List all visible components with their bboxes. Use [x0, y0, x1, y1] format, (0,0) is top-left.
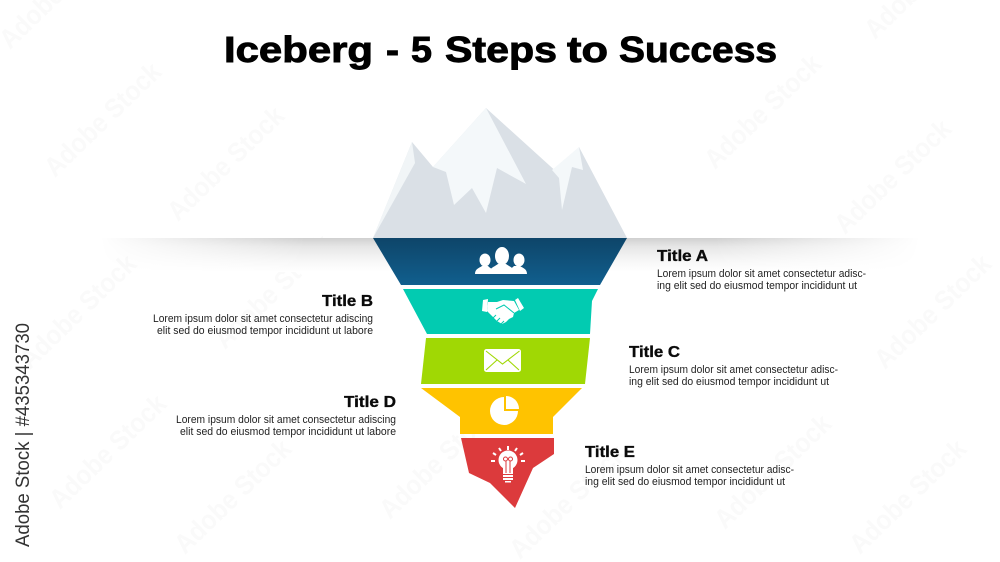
watermark pattern: Adobe Stock	[698, 48, 828, 174]
watermark pattern: Adobe Stock	[161, 100, 291, 226]
watermark pattern: Adobe Stock	[503, 438, 633, 562]
title: -	[386, 29, 399, 70]
watermark pattern: Adobe Stock	[828, 113, 958, 239]
text block: Title A: Title A	[657, 248, 708, 265]
title: Success	[619, 29, 777, 70]
text block: Title B: Lorem ipsum dolor sit amet consectetur adiscing	[153, 313, 373, 325]
icon: light bulb	[491, 446, 525, 482]
text block: Title B: Title B	[322, 293, 373, 310]
text block: Title E: ing elit sed do eiusmod tempor incididunt ut	[585, 476, 785, 488]
watermark pattern: Adobe Stock	[708, 408, 838, 534]
step 3: green band	[421, 338, 590, 384]
watermark pattern: Adobe Stock	[843, 433, 973, 559]
step 4: yellow band	[421, 388, 582, 434]
title: to	[567, 29, 608, 70]
text block: Title A: ing elit sed do eiusmod tempor incididunt ut	[657, 280, 857, 292]
step 1: blue band	[373, 238, 627, 285]
text block: Title D: Title D	[344, 394, 396, 411]
snow: main peak	[433, 108, 526, 213]
step 5: red tip	[461, 438, 554, 508]
text block: Title B	[153, 293, 373, 337]
text block: Title A: Lorem ipsum dolor sit amet consectetur adisc-	[657, 268, 866, 280]
text block: Title A	[657, 248, 866, 292]
watermark pattern: Adobe Stock	[43, 388, 173, 514]
text block: Title C: Title C	[629, 344, 680, 361]
text block: Title C: Lorem ipsum dolor sit amet consectetur adisc-	[629, 364, 838, 376]
text block: Title C: ing elit sed do eiusmod tempor incididunt ut	[629, 376, 829, 388]
icon: people	[475, 247, 527, 274]
text block: Title D	[176, 394, 396, 438]
snow: right peak	[552, 147, 583, 210]
title: 5	[411, 29, 432, 70]
text block: Title D: elit sed do eiusmod tempor incididunt ut labore	[180, 426, 396, 438]
iceberg tip: mountain	[373, 108, 627, 238]
title: Steps	[445, 29, 557, 70]
icon: pie chart	[490, 396, 519, 425]
water surface shadow	[138, 238, 882, 262]
text block: Title D: Lorem ipsum dolor sit amet consectetur adiscing	[176, 414, 396, 426]
title: Iceberg	[224, 29, 373, 70]
text block: Title E: Title E	[585, 444, 635, 461]
icon: handshake	[482, 298, 524, 324]
watermark pattern: Adobe Stock	[13, 248, 143, 374]
watermark pattern: Adobe Stock	[168, 433, 298, 559]
watermark pattern: Adobe Stock	[208, 228, 338, 354]
step 2: teal band	[403, 289, 598, 334]
text block: Title E: Lorem ipsum dolor sit amet consectetur adisc-	[585, 464, 794, 476]
watermark pattern: Adobe Stock	[373, 398, 503, 524]
text block: Title E	[585, 444, 794, 488]
stock id label: Adobe Stock | #435343730	[13, 323, 34, 547]
text block: Title C	[629, 344, 838, 388]
icon: envelope	[484, 349, 521, 372]
title	[224, 29, 777, 70]
text block: Title B: elit sed do eiusmod tempor incididunt ut labore	[157, 325, 373, 337]
watermark pattern: Adobe Stock	[38, 56, 168, 182]
snow: left peak	[373, 142, 415, 238]
